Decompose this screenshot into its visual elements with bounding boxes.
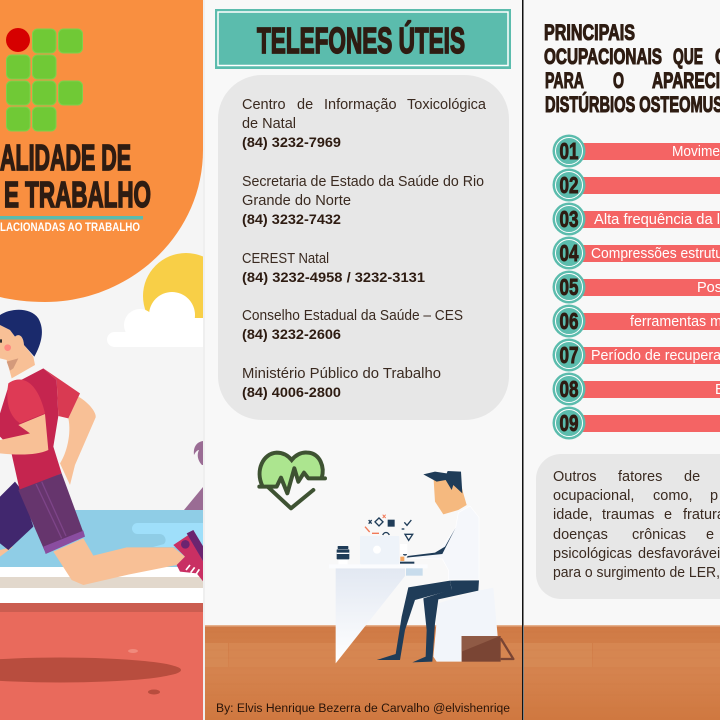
list item 07: Período de recupera xyxy=(591,348,720,364)
contact: ministério xyxy=(242,366,441,400)
contact: cerest: CEREST Natal xyxy=(242,251,329,267)
logo: instituto federal xyxy=(6,28,82,131)
callout: outros fatores: e xyxy=(706,527,714,543)
illustration: man at desk xyxy=(329,471,513,663)
callout: outros fatores: e xyxy=(664,507,672,523)
header: telefones úteis: TELEFONES ÚTEIS xyxy=(257,19,465,61)
callout: outros fatores: idade, xyxy=(553,507,593,523)
list item 02: 02 xyxy=(560,172,578,198)
contact: secretaria: (84) 3232-7432 xyxy=(242,211,341,227)
contact: conselho xyxy=(242,308,463,342)
floor xyxy=(524,625,720,720)
list item 03: Alta frequência da l xyxy=(594,212,720,228)
list item 07 xyxy=(552,338,720,372)
contact: centro toxicológico: Informação xyxy=(324,97,397,113)
shape: orange header xyxy=(0,0,203,302)
callout: outros fatores: fatores xyxy=(618,469,662,485)
divider: black line xyxy=(522,0,524,720)
list item 01: 01 xyxy=(560,138,579,164)
subtitle: LACIONADAS AO TRABALHO xyxy=(0,222,140,234)
contact: ministério: (84) 4006-2800 xyxy=(242,384,341,400)
heading: QUE xyxy=(673,44,703,69)
divider: title underline xyxy=(0,216,143,220)
contact: centro toxicológico: de xyxy=(297,97,313,113)
list item 07: 07 xyxy=(560,342,578,368)
icon: sun xyxy=(143,253,203,318)
callout: outros fatores: Outros xyxy=(553,469,597,485)
title: E TRABALHO xyxy=(4,174,151,215)
panel: cover xyxy=(0,0,203,720)
contact: cerest: (84) 3232-4958 / 3232-3131 xyxy=(242,269,425,285)
list item 06 xyxy=(552,304,720,338)
list item 09: 09 xyxy=(560,410,578,436)
callout: outros fatores: doenças xyxy=(553,527,608,543)
heading: O xyxy=(613,68,624,93)
contact: conselho: (84) 3232-2606 xyxy=(242,326,341,342)
panel: fatores xyxy=(524,0,720,720)
heading: PRINCIPAIS xyxy=(544,20,635,45)
callout: outros fatores: traumas xyxy=(602,507,654,523)
panel: telefones xyxy=(203,0,522,720)
contact: conselho: Conselho Estadual da Saúde – CES xyxy=(242,308,463,324)
contact: secretaria: Grande do Norte xyxy=(242,193,351,209)
illustration: runner xyxy=(0,310,203,585)
list item 09 xyxy=(552,406,720,440)
header: telefones úteis xyxy=(215,9,511,69)
list item 08 xyxy=(552,372,720,406)
list item 08: 08 xyxy=(560,376,579,402)
contact: ministério: Ministério Público do Trabalho xyxy=(242,366,441,382)
list item 05: 05 xyxy=(560,274,579,300)
list item 03: 03 xyxy=(560,206,578,232)
list item 06: 06 xyxy=(560,308,578,334)
beach scene xyxy=(0,441,222,720)
contact: centro toxicológico: de Natal xyxy=(242,116,296,132)
list item 04: 04 xyxy=(560,240,579,266)
heading: OCUPACIONAIS xyxy=(544,44,662,69)
callout: outros fatores: de xyxy=(684,469,700,485)
contact: centro toxicológico: Toxicológica xyxy=(407,97,487,113)
callout: outros fatores xyxy=(536,454,720,599)
callout: outros fatores: psicológicas xyxy=(553,546,632,562)
credit: By: Elvis Henrique Bezerra de Carvalho @elvishenriqe xyxy=(216,703,510,715)
panel: contact list xyxy=(218,75,509,420)
list item 03 xyxy=(552,202,720,236)
title: ALIDADE DE xyxy=(0,137,131,178)
contact: cerest xyxy=(242,251,425,285)
title xyxy=(0,144,151,208)
contact: secretaria: Secretaria de Estado da Saúde do Rio xyxy=(242,174,484,190)
callout: outros fatores: crônicas xyxy=(632,527,686,543)
heading: PARA xyxy=(545,68,584,93)
heading xyxy=(544,20,720,117)
contact: secretaria xyxy=(242,174,484,227)
floor xyxy=(205,625,522,720)
list item 05 xyxy=(552,270,720,304)
callout: outros fatores: ocupacional, xyxy=(553,488,634,504)
list item 01 xyxy=(552,134,720,168)
list item 04 xyxy=(552,236,720,270)
callout: outros fatores: p xyxy=(710,488,718,504)
icon: heart with pulse xyxy=(259,452,325,508)
icon: cloud xyxy=(107,292,203,347)
callout: outros fatores: como, xyxy=(653,488,692,504)
contact: centro toxicológico: Centro xyxy=(242,97,286,113)
contact: centro toxicológico xyxy=(242,97,487,150)
list item 02 xyxy=(552,168,720,202)
contact: centro toxicológico: (84) 3232-7969 xyxy=(242,134,341,150)
